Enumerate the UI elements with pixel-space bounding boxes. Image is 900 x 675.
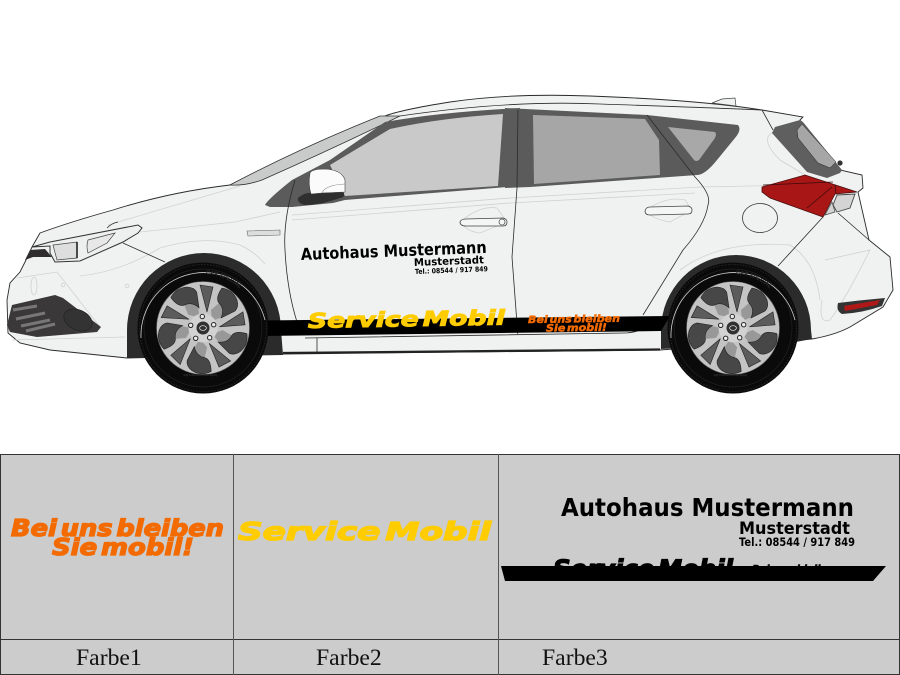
decal: service mobil: Service Mobil xyxy=(308,306,506,333)
front lower bumper xyxy=(7,295,101,337)
side marker xyxy=(247,230,280,236)
swatch: Farbe3 lettering: Tel.: 08544 / 917 849 xyxy=(739,535,855,549)
front wheel arch xyxy=(127,253,283,358)
swatch: Farbe1 slogan xyxy=(11,516,224,561)
swatch: Farbe1 slogan: Sie mobil! xyxy=(52,535,194,561)
label: Farbe3: Farbe3 xyxy=(542,645,608,671)
side mirror xyxy=(298,169,345,205)
taillight xyxy=(762,175,869,266)
black stripe xyxy=(262,316,670,336)
front grille xyxy=(25,249,52,260)
front door glass xyxy=(330,114,503,196)
window surround front xyxy=(265,108,520,207)
decal: slogan: Sie mobil! xyxy=(546,323,607,334)
panel: car illustration xyxy=(6,94,894,394)
front wheel: CAR SPECIAL xyxy=(206,270,240,288)
car body xyxy=(7,95,893,358)
door lines xyxy=(285,110,709,353)
panel: colour table xyxy=(0,454,900,675)
decal: town: Musterstadt xyxy=(414,254,484,269)
swatch: Farbe3 lettering: Bei uns bleiben xyxy=(752,564,838,575)
front wheel: infodecoration.de xyxy=(183,373,217,378)
rear door glass xyxy=(533,115,660,184)
swatch: Farbe2 service mobil: Service Mobil xyxy=(238,517,492,546)
spoiler xyxy=(712,98,736,106)
label: Farbe2: Farbe2 xyxy=(316,645,382,671)
decal: phone: Tel.: 08544 / 917 849 xyxy=(415,265,488,276)
rear window xyxy=(772,120,843,178)
swatch: Farbe1 slogan: Bei uns bleiben xyxy=(11,516,224,542)
front wheel xyxy=(138,262,268,394)
decal: slogan: Bei uns bleiben xyxy=(528,314,620,326)
window surround rear xyxy=(505,108,739,188)
decal: company name: Autohaus Mustermann xyxy=(300,238,487,264)
rear wheel arch xyxy=(661,255,812,349)
rear door handle xyxy=(645,199,692,222)
label: Farbe1: Farbe1 xyxy=(76,645,142,671)
front door handle xyxy=(460,208,507,233)
swatch: Farbe3 lettering xyxy=(501,493,886,583)
rear wheel: CAR SPECIAL xyxy=(736,270,770,288)
crease lines xyxy=(12,130,870,340)
headlight xyxy=(32,222,165,262)
swatch: Farbe3 lettering: Musterstadt xyxy=(739,519,850,538)
swatch: Farbe3 lettering: Autohaus Mustermann xyxy=(561,493,854,522)
rear quarter glass xyxy=(668,127,716,161)
decal: slogan xyxy=(528,314,620,334)
rear reflector xyxy=(838,298,885,314)
fuel door xyxy=(742,204,778,232)
swatch: Farbe3 lettering: Service Mobil xyxy=(553,555,734,583)
rear wheel xyxy=(668,262,798,394)
rear wheel: infodecoration.de xyxy=(713,373,747,378)
roof and windshield strip xyxy=(230,116,400,185)
sill xyxy=(283,332,660,353)
